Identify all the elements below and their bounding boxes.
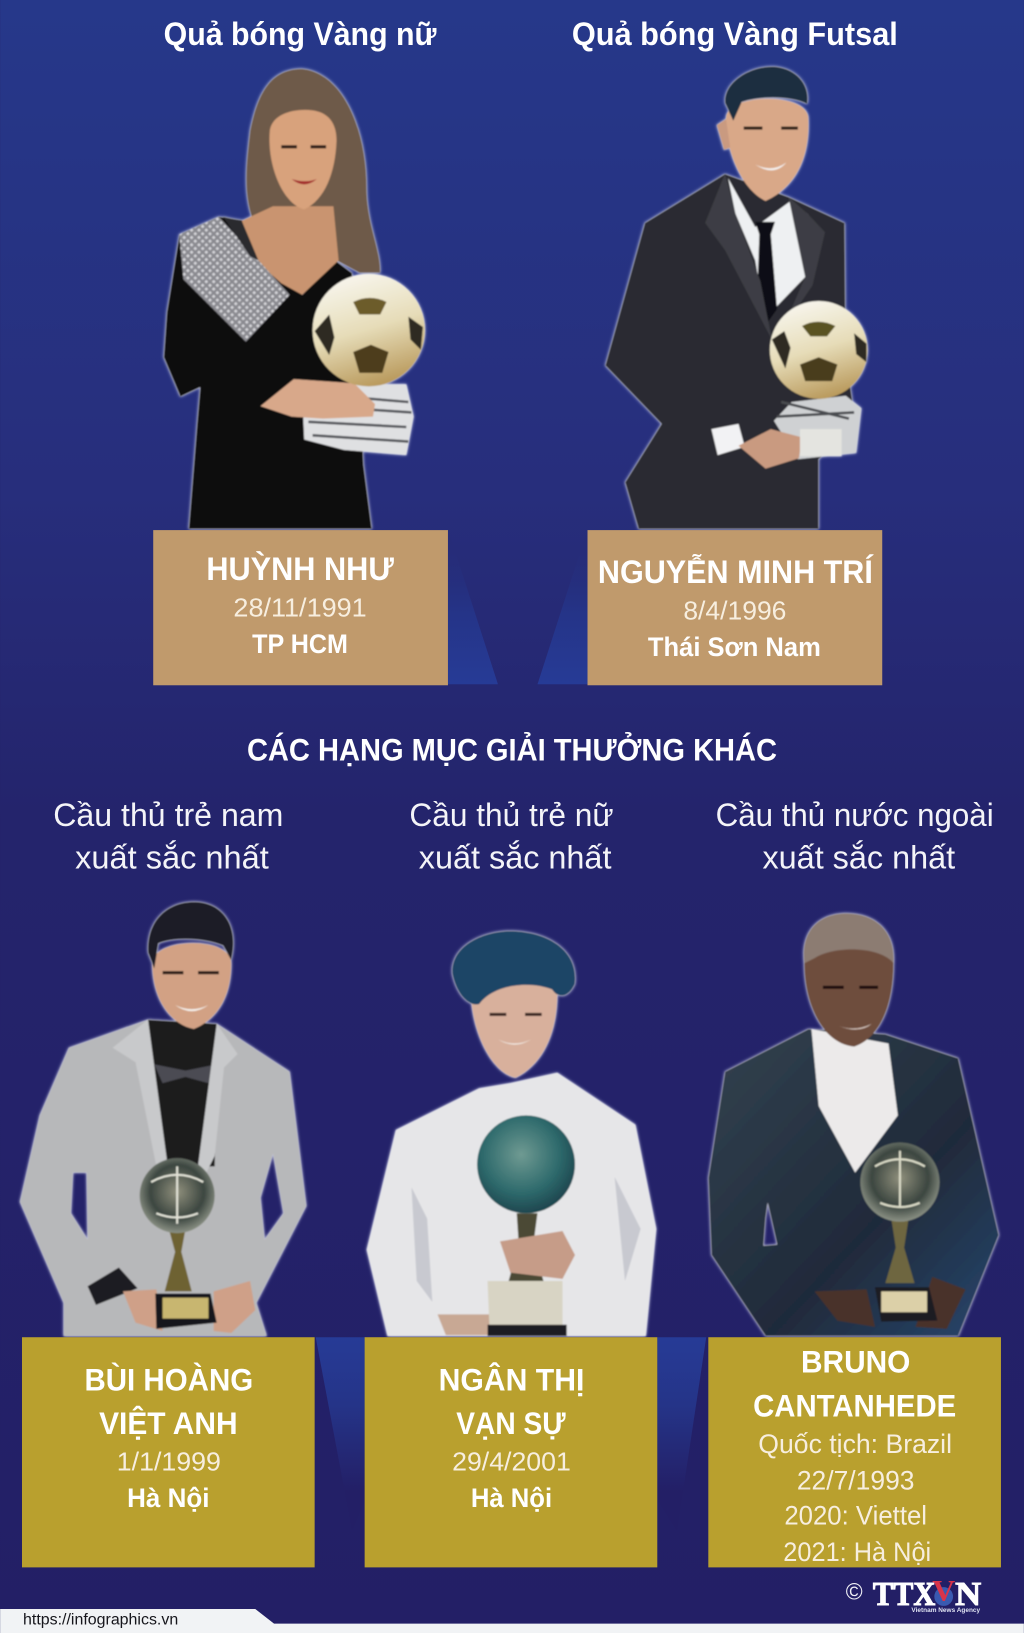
panel: Nguyễn Minh Trí info: Thái Sơn Nam: [648, 631, 821, 662]
panel: Ngân Thị Vạn Sự info: [365, 1337, 657, 1567]
logo: TTXVN: N: [955, 1576, 981, 1613]
category: best young female player: [409, 797, 614, 876]
category: best young male player: [53, 797, 283, 876]
panel: Bruno Cantanhede info: 2020: Viettel: [784, 1500, 927, 1531]
panel: Bùi Hoàng Việt Anh info: [22, 1337, 315, 1567]
ribbon: first panel shadow: [448, 529, 498, 684]
panel: Ngân Thị Vạn Sự info: Hà Nội: [471, 1482, 552, 1513]
heading: Quả bóng Vàng nữ: Quả bóng Vàng nữ: [164, 16, 437, 52]
ribbon: between young and foreign panels: [657, 1337, 706, 1531]
panel: Huỳnh Như info: [153, 530, 448, 685]
panel: Bruno Cantanhede info: CANTANHEDE: [753, 1388, 956, 1423]
panel: Bruno Cantanhede info: [708, 1337, 1001, 1567]
category: best foreign player: Cầu thủ nước ngoài: [716, 797, 994, 833]
panel: Bruno Cantanhede info: 22/7/1993: [797, 1464, 915, 1495]
footer: source url bar: [0, 1609, 1024, 1633]
panel: Ngân Thị Vạn Sự info: 29/4/2001: [452, 1447, 571, 1477]
photo: Bruno Cantanhede holding trophy: [708, 913, 999, 1336]
logo: TTXVN: V: [932, 1576, 955, 1608]
heading: Quả bóng Vàng Futsal: Quả bóng Vàng Futsal: [572, 16, 898, 52]
panel: Bruno Cantanhede info: BRUNO: [801, 1345, 910, 1380]
photo: Huỳnh Như holding golden ball: [164, 69, 425, 529]
logo: TTXVN: ©: [846, 1579, 863, 1605]
category: best foreign player: [716, 797, 994, 876]
panel: Huỳnh Như info: 28/11/1991: [233, 593, 367, 623]
category: best young female player: xuất sắc nhất: [419, 840, 611, 876]
category: best young male player: Cầu thủ trẻ nam: [53, 797, 283, 833]
section heading: other awards: CÁC HẠNG MỤC GIẢI THƯỞNG KHÁC: [247, 731, 777, 767]
logo: TTXVN: Vietnam News Agency: [911, 1607, 981, 1614]
panel: Nguyễn Minh Trí info: NGUYỄN MINH TRÍ: [598, 554, 874, 590]
logo: TTXVN: TTX: [873, 1576, 935, 1613]
panel: Huỳnh Như info: TP HCM: [252, 628, 348, 659]
panel: Nguyễn Minh Trí info: 8/4/1996: [683, 596, 786, 626]
panel: Bruno Cantanhede info: Quốc tịch: Brazil: [758, 1428, 952, 1459]
panel: Ngân Thị Vạn Sự info: VẠN SỰ: [456, 1406, 566, 1441]
category: best young male player: xuất sắc nhất: [75, 840, 269, 876]
photo: Bùi Hoàng Việt Anh holding trophy: [20, 902, 306, 1336]
panel: Bruno Cantanhede info: 2021: Hà Nội: [783, 1536, 931, 1567]
category: best young female player: Cầu thủ trẻ nữ: [409, 797, 614, 833]
panel: Bùi Hoàng Việt Anh info: BÙI HOÀNG: [84, 1361, 253, 1397]
category: best foreign player: xuất sắc nhất: [762, 840, 955, 876]
ribbon: between young player panels: [316, 1337, 366, 1531]
panel: Huỳnh Như info: HUỲNH NHƯ: [206, 551, 394, 587]
panel: Nguyễn Minh Trí info: [588, 530, 882, 685]
photo: Nguyễn Minh Trí holding golden ball: [605, 66, 868, 529]
photo: Ngân Thị Vạn Sự holding trophy: [367, 931, 656, 1336]
logo: TTXVN: [846, 1576, 981, 1614]
panel: Bùi Hoàng Việt Anh info: 1/1/1999: [117, 1447, 221, 1477]
panel: Bùi Hoàng Việt Anh info: Hà Nội: [127, 1482, 209, 1513]
ribbon: second panel shadow: [538, 529, 588, 684]
panel: Bùi Hoàng Việt Anh info: VIỆT ANH: [99, 1405, 238, 1441]
footer: source url bar: https://infographics.vn: [23, 1612, 178, 1629]
panel: Ngân Thị Vạn Sự info: NGÂN THỊ: [439, 1361, 584, 1397]
